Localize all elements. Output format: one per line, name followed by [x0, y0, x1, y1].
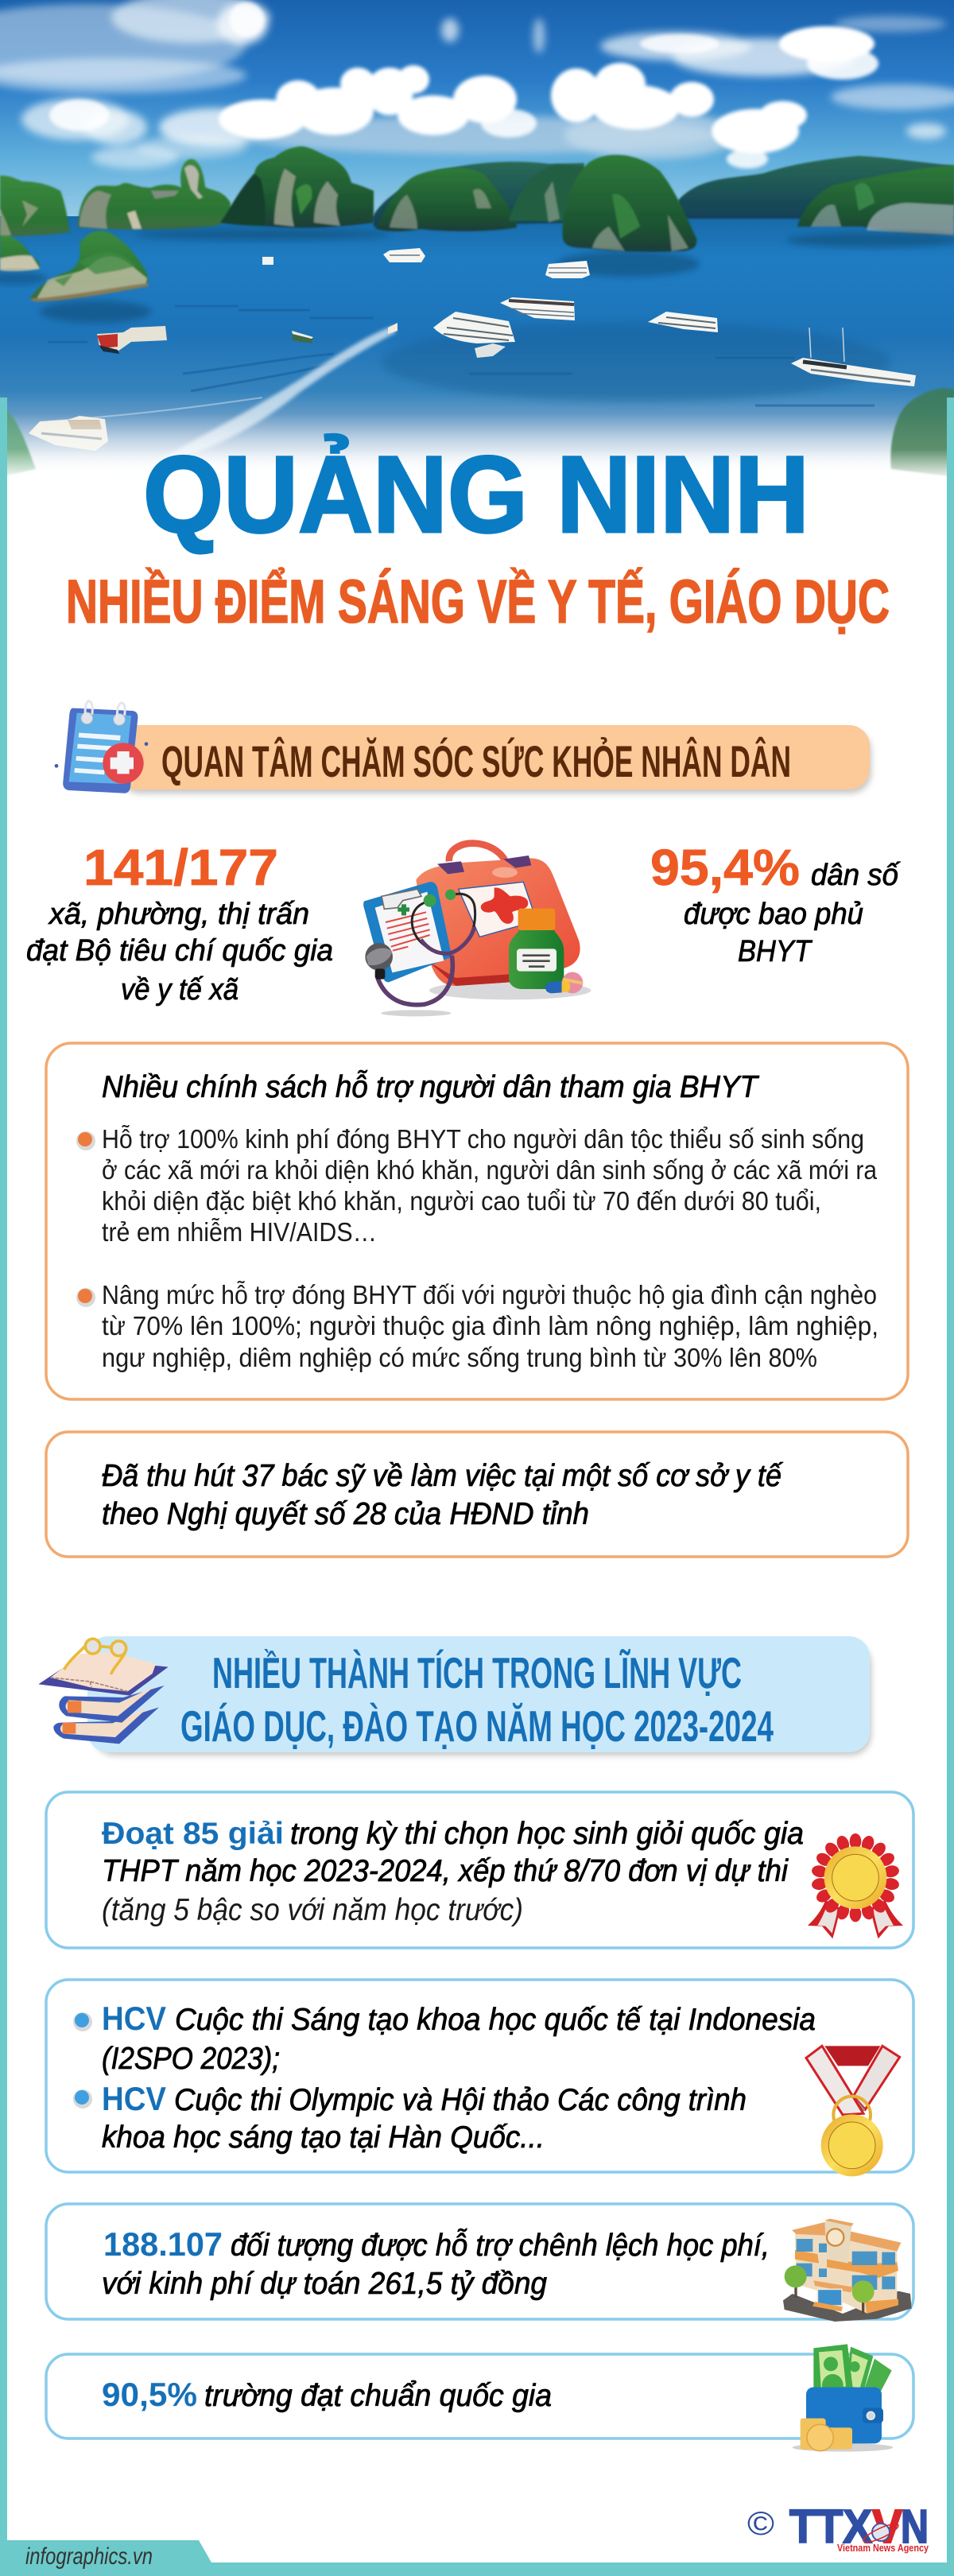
right near karst — [797, 165, 954, 235]
award 2: HCV — [102, 2080, 166, 2117]
statistic: 95.4% BHYT coverage: 95,4% — [650, 839, 800, 896]
bullet — [76, 1288, 95, 1307]
policy 2: ngư nghiệp, diêm nghiệp có mức sống trung bình từ 30% lên 80% — [102, 1343, 817, 1372]
bullet — [76, 1131, 95, 1150]
icon: wallet with money and coins — [793, 2344, 893, 2452]
panel: national competition awards: (tăng 5 bậc so với năm học trước) — [102, 1893, 523, 1927]
award 1 — [102, 2000, 816, 2076]
statistic: 95.4% BHYT coverage: BHYT — [738, 935, 813, 968]
panel: tuition support: với kinh phí dự toán 261,5 tỷ đồng — [102, 2267, 547, 2301]
bullet — [73, 2012, 92, 2031]
award 1: Cuộc thi Sáng tạo khoa học quốc tế tại Indonesia — [175, 2003, 816, 2037]
statistic: 141/177 communes — [26, 839, 333, 1007]
statistic: 141/177 communes: về y tế xã — [121, 973, 238, 1007]
award 2: khoa học sáng tạo tại Hàn Quốc... — [102, 2120, 545, 2155]
policy 1: trẻ em nhiễm HIV/AIDS… — [102, 1217, 377, 1247]
mid left island — [29, 231, 148, 301]
logo: TTXVN: © — [747, 2504, 774, 2542]
icon: rosette medal — [808, 1833, 903, 1938]
logo: TTXVN: V — [872, 2500, 902, 2553]
policy 2 — [102, 1280, 878, 1372]
statistic: 141/177 communes: đạt Bộ tiêu chí quốc gia — [26, 934, 333, 968]
panel: national competition awards: Đoạt 85 giải — [102, 1817, 284, 1851]
logo: TTXVN: N — [901, 2500, 929, 2553]
panel: attracting doctors: theo Nghị quyết số 28 của HĐND tỉnh — [102, 1497, 589, 1531]
footer tab: website — [0, 2540, 215, 2570]
panel: BHYT support policies — [46, 1043, 908, 1399]
panel: tuition support: 188.107 — [103, 2225, 223, 2263]
panel: attracting doctors — [46, 1432, 908, 1557]
panel: tuition support — [46, 2204, 913, 2322]
icon: medical notepad — [55, 701, 148, 793]
panel heading: Nhiều chính sách hỗ trợ người dân tham gia BHYT — [102, 1069, 760, 1104]
award 2: Cuộc thi Olympic và Hội thảo Các công trình — [174, 2083, 747, 2117]
large karst left — [220, 146, 374, 228]
policy 2: Nâng mức hỗ trợ đóng BHYT đối với người thuộc hộ gia đình cận nghèo — [102, 1280, 877, 1309]
section heading: education — [87, 1636, 871, 1755]
policy 1: khỏi diện đặc biệt khó khăn, người cao tuổi từ 70 đến dưới 80 tuổi, — [102, 1186, 821, 1216]
photo: Ha Long Bay — [0, 0, 954, 481]
panel: national standard schools — [46, 2344, 913, 2452]
title: QUẢNG NINH — [143, 433, 809, 556]
icon: school building — [783, 2219, 912, 2322]
statistic: 141/177 communes: xã, phường, thị trấn — [48, 898, 309, 931]
logo: TTXVN: Vietnam News Agency — [837, 2542, 929, 2554]
logo: TTXVN — [747, 2500, 929, 2554]
panel: national competition awards: THPT năm học 2023-2024, xếp thứ 8/70 đơn vị dự thi — [102, 1854, 789, 1888]
policy 2: từ 70% lên 100%; người thuộc gia đình làm nông nghiệp, lâm nghiệp, — [102, 1311, 878, 1340]
award 1: (I2SPO 2023); — [102, 2042, 280, 2076]
icon: stack of books with glasses — [38, 1639, 169, 1744]
statistic: 141/177 communes: 141/177 — [83, 839, 278, 896]
policy 1 — [102, 1124, 878, 1247]
award 1: HCV — [102, 2000, 166, 2037]
footer tab: website: infographics.vn — [25, 2543, 153, 2570]
icon: medical bag with clipboard and stethoscope — [363, 844, 591, 1016]
policy 1: Hỗ trợ 100% kinh phí đóng BHYT cho người dân tộc thiểu số sinh sống — [102, 1124, 864, 1154]
panel: national competition awards: trong kỳ thi chọn học sinh giỏi quốc gia — [290, 1817, 804, 1851]
statistic: 95.4% BHYT coverage: dân số — [811, 859, 901, 892]
panel: national standard schools: trường đạt chuẩn quốc gia — [204, 2379, 552, 2413]
small left island — [0, 235, 40, 271]
icon: gold medal on ribbon — [806, 2046, 900, 2176]
panel: tuition support: đối tượng được hỗ trợ chênh lệch học phí, — [231, 2228, 770, 2263]
panel: international gold medals — [46, 1980, 913, 2176]
panel: attracting doctors: Đã thu hút 37 bác sỹ về làm việc tại một số cơ sở y tế — [102, 1459, 783, 1493]
central karst group — [375, 168, 517, 231]
statistic: 95.4% BHYT coverage — [650, 839, 901, 968]
award 2 — [102, 2080, 747, 2155]
bullet — [73, 2089, 92, 2109]
section heading: healthcare — [111, 725, 871, 793]
logo: TTXVN: TTX — [789, 2500, 872, 2553]
statistic: 95.4% BHYT coverage: được bao phủ — [684, 898, 863, 931]
panel: national competition awards — [46, 1792, 913, 1948]
policy 1: ở các xã mới ra khỏi diện khó khăn, người dân sinh sống ở các xã mới ra — [102, 1155, 878, 1185]
panel: national standard schools: 90,5% — [102, 2376, 197, 2413]
big dark karst — [563, 155, 696, 252]
island left — [0, 176, 70, 236]
island with spire — [78, 159, 231, 230]
